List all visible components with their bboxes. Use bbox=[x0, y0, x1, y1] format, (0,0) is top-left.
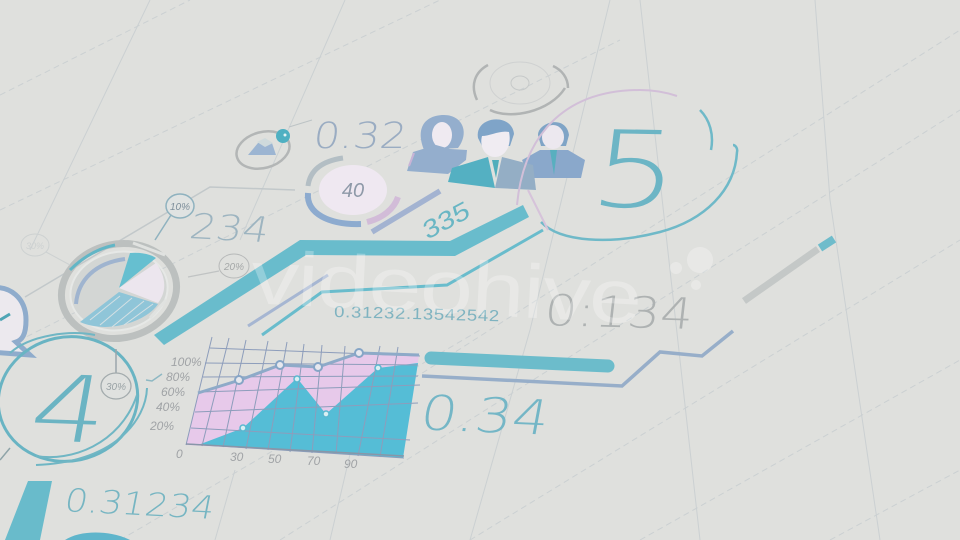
chart axis labels: 50 bbox=[268, 452, 282, 466]
thick bar: bottom left bbox=[5, 481, 52, 540]
number: 0.34: 0.34 bbox=[416, 385, 554, 446]
number: 0.31234: 0.31234 bbox=[61, 482, 218, 527]
person: man centre bbox=[448, 119, 536, 190]
gauge: 40 bbox=[308, 158, 398, 224]
number: 234: 234 bbox=[186, 206, 273, 251]
badge: 30% bbox=[101, 373, 131, 399]
thick teal bar: mid bbox=[431, 358, 608, 366]
badge: faint bbox=[21, 234, 70, 265]
icon: speech bubble bbox=[0, 288, 30, 355]
chart axis labels: 40% bbox=[156, 400, 180, 414]
badge: 20% bbox=[188, 254, 249, 278]
chart axis labels: 90 bbox=[344, 457, 358, 471]
number: long decimal: 0.31232.13542542 bbox=[334, 302, 500, 325]
pie chart bbox=[52, 233, 186, 349]
gauge value: 40 bbox=[342, 180, 364, 202]
target rings: top bbox=[474, 62, 568, 114]
badge: 30%: 30% bbox=[106, 382, 126, 393]
circle: number 5 bbox=[517, 90, 737, 240]
number: 5: 5 bbox=[584, 109, 687, 233]
chart axis labels: 70 bbox=[307, 454, 321, 468]
watermark: videohive bbox=[249, 235, 643, 340]
stepped line bbox=[422, 331, 733, 386]
chart axis labels: 20% bbox=[149, 419, 174, 433]
person: woman bbox=[407, 115, 467, 174]
chart axis labels: 30 bbox=[230, 450, 244, 464]
stepped thick bar bbox=[154, 205, 529, 345]
small icon: box with ring bbox=[232, 120, 312, 174]
progress bar: top right bbox=[744, 239, 834, 301]
diagonal bar bbox=[372, 191, 440, 232]
number: 4: 4 bbox=[22, 356, 117, 465]
icon: team of people bbox=[407, 115, 585, 190]
chart axis labels bbox=[149, 355, 358, 471]
number: 0.32: 0.32 bbox=[311, 116, 409, 157]
chart axis labels: 100% bbox=[171, 355, 202, 369]
chart axis labels: 80% bbox=[166, 370, 190, 384]
person: man right bbox=[522, 122, 585, 178]
chart axis labels: 60% bbox=[161, 385, 185, 399]
connector line: top left bbox=[25, 187, 295, 297]
dial: number 4 bbox=[0, 324, 162, 474]
badge: 20%: 20% bbox=[223, 262, 244, 273]
chart axis labels: 0 bbox=[176, 447, 183, 461]
thin bars below stepped bar bbox=[248, 230, 543, 335]
area chart bbox=[149, 337, 420, 471]
badge: faint: 30% bbox=[26, 241, 44, 251]
number: 0:134: 0:134 bbox=[542, 286, 696, 340]
badge: 10%: 10% bbox=[170, 202, 190, 213]
badge: 10% bbox=[155, 194, 194, 240]
blue arc: bottom bbox=[65, 532, 130, 540]
number: 335: 335 bbox=[419, 195, 473, 245]
